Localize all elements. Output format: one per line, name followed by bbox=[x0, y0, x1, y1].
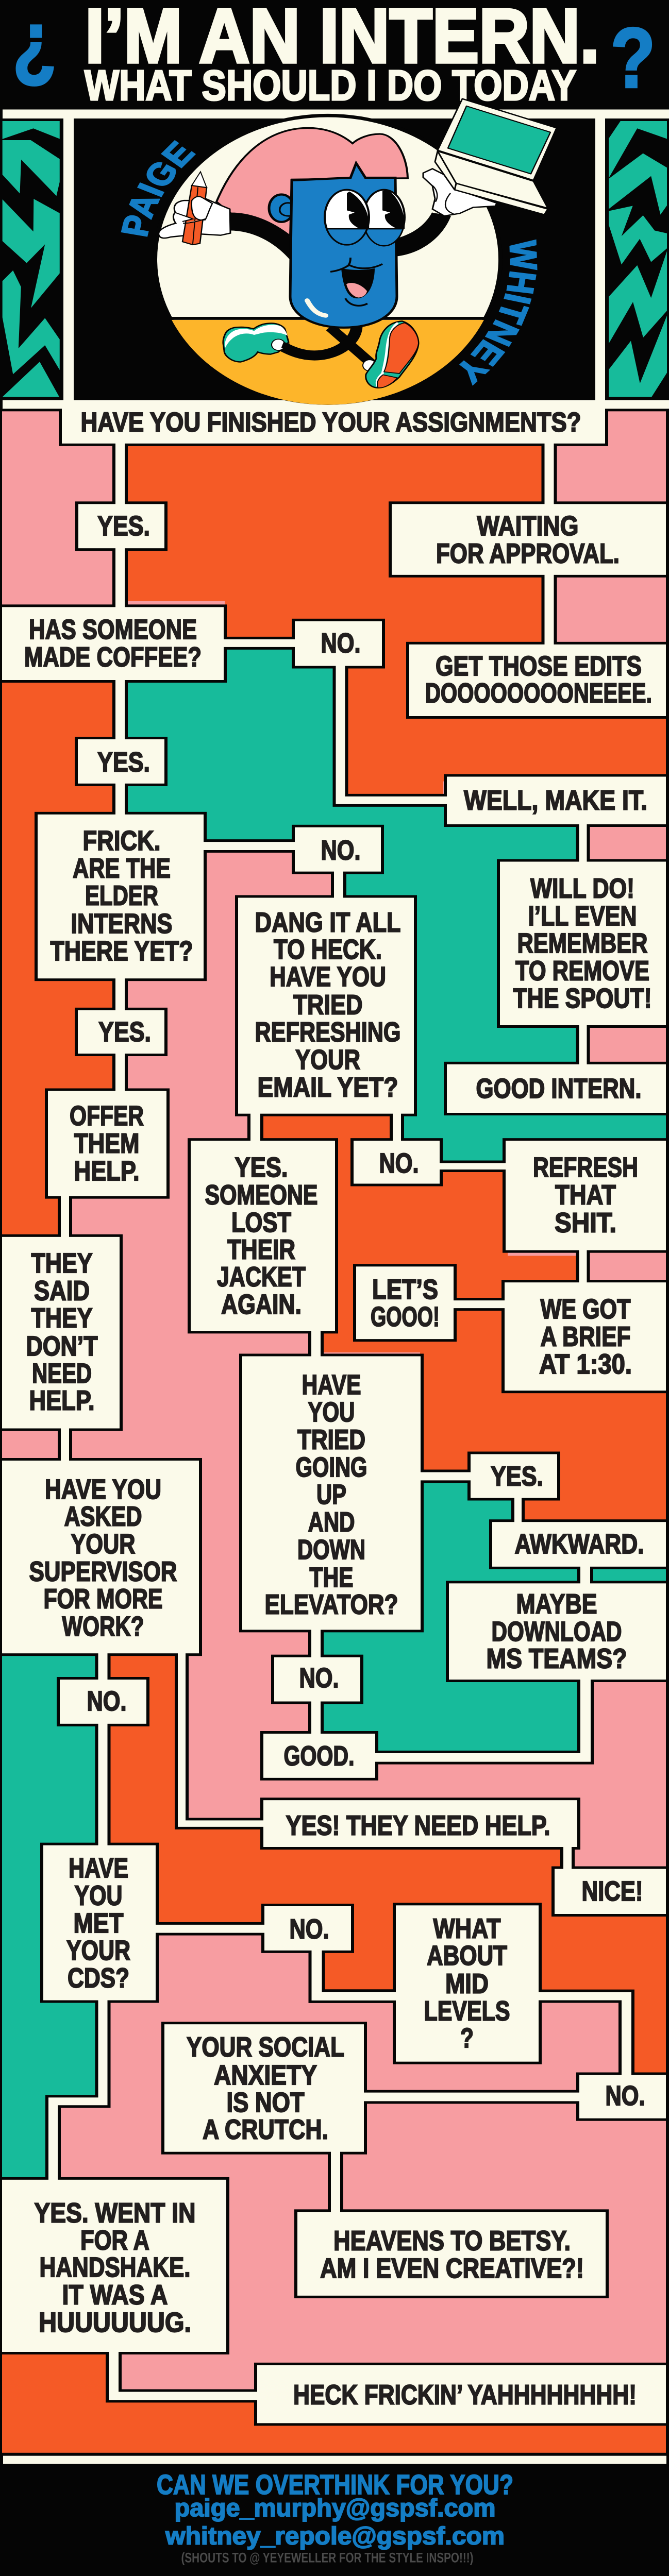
box: no bbox=[273, 1656, 362, 1703]
box: yes: YES. bbox=[491, 1460, 543, 1492]
box: no: NO. bbox=[290, 1913, 329, 1944]
ear bbox=[269, 195, 294, 222]
box: have you met your cds: YOU bbox=[75, 1880, 123, 1911]
name: Paige: PAIGE bbox=[121, 140, 196, 237]
box: yes went in for a handshake: IT WAS A bbox=[62, 2279, 168, 2310]
box: yes went in for a handshake: HUUUUUUG. bbox=[39, 2307, 191, 2338]
box: have you tried going up and down the elevator: ELEVATOR? bbox=[265, 1589, 398, 1620]
circle badge bbox=[155, 115, 500, 405]
box: have you met your cds: CDS? bbox=[68, 1962, 129, 1993]
box: they said they don't need help: HELP. bbox=[29, 1385, 95, 1416]
box: they said they don't need help: THEY bbox=[31, 1302, 93, 1333]
box: refresh that shit: THAT bbox=[555, 1179, 616, 1210]
box: we got a brief: AT 1:30. bbox=[539, 1348, 632, 1380]
box: yes someone lost their jacket again bbox=[189, 1140, 337, 1332]
connector outlines bbox=[53, 442, 627, 2396]
legs bbox=[281, 326, 372, 364]
box: your social anxiety is not a crutch: IS NOT bbox=[227, 2087, 305, 2118]
box: refresh that shit: SHIT. bbox=[555, 1207, 616, 1238]
box: have you asked your supervisor for more work: WORK? bbox=[62, 1611, 144, 1642]
footer email: Paige: paige_murphy@gspsf.com bbox=[175, 2495, 496, 2522]
box: dang it all to heck: TRIED bbox=[293, 989, 362, 1020]
box: no: NO. bbox=[321, 834, 360, 866]
box: frick, are the elder interns there yet bbox=[36, 813, 205, 980]
box: no bbox=[293, 826, 382, 873]
box: good: GOOD. bbox=[283, 1740, 355, 1771]
box: have you tried going up and down the elevator: TRIED bbox=[297, 1424, 365, 1455]
box: nice bbox=[553, 1868, 668, 1916]
box: heck frickin yah bbox=[256, 2364, 668, 2425]
box: dang it all to heck: DANG IT ALL bbox=[255, 906, 401, 938]
box: heavens to betsy bbox=[296, 2211, 607, 2297]
footer heading: CAN WE OVERTHINK FOR YOU? bbox=[157, 2470, 513, 2500]
box: have you tried going up and down the elevator: UP bbox=[316, 1479, 346, 1510]
box: your social anxiety is not a crutch bbox=[163, 2023, 365, 2153]
box: have you tried going up and down the elevator bbox=[241, 1355, 422, 1631]
laptop bbox=[435, 99, 557, 215]
box: yes someone lost their jacket again: AGAIN. bbox=[221, 1289, 302, 1320]
box: what about mid levels: MID bbox=[445, 1968, 489, 1999]
box: they said they don't need help: DON’T bbox=[26, 1330, 98, 1362]
box: frick, are the elder interns there yet: INTERNS bbox=[71, 908, 173, 939]
box: waiting for approval: WAITING bbox=[477, 510, 579, 541]
box: have you met your cds: HAVE bbox=[69, 1852, 128, 1884]
box: what about mid levels: WHAT bbox=[433, 1913, 501, 1944]
box: good intern bbox=[445, 1063, 668, 1114]
box: maybe download ms teams bbox=[447, 1582, 668, 1681]
box: yes went in for a handshake: YES. WENT IN bbox=[35, 2197, 196, 2228]
footer email: Whitney: whitney_repole@gspsf.com bbox=[165, 2522, 505, 2550]
box: yes: YES. bbox=[98, 1016, 151, 1047]
box: no bbox=[578, 2074, 668, 2120]
box: frick, are the elder interns there yet: ELDER bbox=[85, 880, 158, 911]
box: they said they don't need help: NEED bbox=[32, 1358, 92, 1389]
box: let's gooo bbox=[355, 1265, 455, 1341]
box: no bbox=[263, 1905, 353, 1952]
box: have you asked your supervisor for more work: FOR MORE bbox=[43, 1583, 163, 1614]
box: dang it all to heck: YOUR bbox=[295, 1044, 360, 1075]
box: have you tried going up and down the elevator: HAVE bbox=[302, 1369, 361, 1400]
box: dang it all to heck: HAVE YOU bbox=[270, 961, 386, 992]
box: yes bbox=[76, 738, 166, 785]
box: no bbox=[58, 1679, 148, 1725]
box: dang it all to heck: TO HECK. bbox=[274, 934, 382, 965]
box: we got a brief bbox=[503, 1281, 668, 1392]
box: well, make it bbox=[445, 775, 668, 825]
box: frick, are the elder interns there yet: ARE THE bbox=[73, 852, 171, 884]
right shoe bbox=[363, 321, 419, 388]
box: frick, are the elder interns there yet: FRICK. bbox=[82, 825, 160, 856]
box: yes someone lost their jacket again: YES. bbox=[235, 1151, 288, 1183]
box: have you asked your supervisor for more work bbox=[0, 1459, 200, 1655]
box: no: NO. bbox=[299, 1662, 339, 1693]
box: maybe download ms teams: MAYBE bbox=[516, 1588, 597, 1619]
box: have you asked your supervisor for more work: ASKED bbox=[64, 1501, 142, 1532]
connector fills bbox=[53, 442, 627, 2396]
band rule under header bbox=[2, 409, 666, 411]
page frame bbox=[0, 409, 669, 2456]
left lightning panel bbox=[3, 121, 60, 397]
box: have you tried going up and down the elevator: DOWN bbox=[297, 1534, 365, 1565]
box: yes bbox=[469, 1453, 559, 1499]
box: dang it all to heck bbox=[237, 896, 415, 1115]
box: offer them help: THEM bbox=[74, 1128, 139, 1159]
right glove bbox=[423, 169, 497, 216]
header frame bands bbox=[3, 109, 669, 409]
box: what about mid levels: LEVELS bbox=[424, 1995, 510, 2026]
box: have you asked your supervisor for more work: YOUR bbox=[71, 1528, 136, 1560]
mouth bbox=[330, 258, 382, 306]
right arm bbox=[397, 212, 451, 257]
character: blue intern bbox=[159, 99, 557, 388]
box: waiting for approval bbox=[390, 503, 668, 576]
body bbox=[290, 163, 397, 328]
box: yes they need help: YES! THEY NEED HELP. bbox=[286, 1810, 550, 1841]
box: get those edits done bbox=[408, 643, 668, 717]
box: no: NO. bbox=[321, 628, 360, 658]
box: no bbox=[352, 1140, 441, 1185]
box: yes they need help bbox=[262, 1799, 579, 1849]
box: has someone made coffee: HAS SOMEONE bbox=[29, 614, 197, 645]
hair bbox=[216, 128, 408, 236]
box: have you tried going up and down the elevator: GOING bbox=[296, 1451, 367, 1483]
box: yes went in for a handshake bbox=[0, 2178, 228, 2353]
box: have you tried going up and down the elevator: YOU bbox=[308, 1396, 355, 1428]
box: they said they don't need help bbox=[0, 1235, 121, 1430]
name: Whitney: WHITNEY bbox=[459, 239, 538, 386]
box: no bbox=[293, 620, 383, 667]
box: frick, are the elder interns there yet: THERE YET? bbox=[51, 935, 193, 967]
left shoe bbox=[223, 324, 289, 362]
left glove and pencil bbox=[159, 172, 230, 245]
box: your social anxiety is not a crutch: YOUR SOCIAL bbox=[187, 2031, 344, 2062]
box: have you met your cds bbox=[42, 1844, 157, 2002]
flowchart colour field bbox=[2, 409, 666, 2453]
box: refresh that shit bbox=[504, 1140, 668, 1251]
box: yes someone lost their jacket again: SOMEONE bbox=[205, 1179, 317, 1210]
box: have you met your cds: MET bbox=[74, 1907, 124, 1939]
box: heavens to betsy: HEAVENS TO BETSY. bbox=[333, 2225, 571, 2256]
box: yes went in for a handshake: HANDSHAKE. bbox=[40, 2251, 191, 2283]
box: have you tried going up and down the elevator: THE bbox=[309, 1562, 354, 1593]
box: yes someone lost their jacket again: THEIR bbox=[227, 1233, 295, 1265]
box: no: NO. bbox=[605, 2080, 645, 2111]
box: your social anxiety is not a crutch: ANXIETY bbox=[214, 2059, 317, 2091]
box: has someone made coffee: MADE COFFEE? bbox=[24, 641, 202, 672]
box: what about mid levels: ? bbox=[460, 2022, 474, 2054]
box: offer them help bbox=[46, 1090, 168, 1197]
box: yes bbox=[76, 1009, 166, 1055]
right lightning panel bbox=[609, 121, 667, 397]
box: yes someone lost their jacket again: LOST bbox=[231, 1207, 291, 1238]
box: dang it all to heck: REFRESHING bbox=[255, 1016, 401, 1047]
box: have you tried going up and down the elevator: AND bbox=[308, 1506, 355, 1537]
box: they said they don't need help: THEY bbox=[31, 1247, 93, 1279]
box: offer them help: OFFER bbox=[70, 1100, 144, 1131]
box: good bbox=[262, 1732, 377, 1779]
box: will do bbox=[498, 860, 668, 1026]
box: yes: YES. bbox=[97, 747, 150, 777]
box: have you met your cds: YOUR bbox=[66, 1935, 130, 1966]
right eye bbox=[363, 190, 405, 246]
box: what about mid levels bbox=[394, 1904, 540, 2063]
box: yes bbox=[77, 503, 166, 550]
box: yes: YES. bbox=[97, 510, 150, 541]
box: have you asked your supervisor for more work: SUPERVISOR bbox=[29, 1555, 177, 1587]
box: no: NO. bbox=[379, 1147, 419, 1179]
box: let's gooo: LET’S bbox=[372, 1274, 438, 1305]
box: let's gooo: GOOO! bbox=[371, 1301, 440, 1332]
box: your social anxiety is not a crutch: A CRUTCH. bbox=[203, 2114, 328, 2145]
box: have you asked your supervisor for more work: HAVE YOU bbox=[45, 1473, 161, 1505]
body highlight bbox=[307, 300, 326, 315]
box: offer them help: HELP. bbox=[74, 1155, 140, 1187]
left arm bbox=[227, 213, 292, 262]
footer credit: (SHOUTS TO @ YEYEWELLER FOR THE STYLE INSPO!!!) bbox=[181, 2550, 474, 2566]
box: dang it all to heck: EMAIL YET? bbox=[258, 1071, 398, 1103]
left eye bbox=[325, 190, 369, 245]
box: they said they don't need help: SAID bbox=[34, 1275, 90, 1306]
box: yes went in for a handshake: FOR A bbox=[80, 2225, 149, 2256]
box: have you finished your assignments bbox=[59, 403, 608, 446]
box: what about mid levels: ABOUT bbox=[427, 1940, 507, 1971]
box: no: NO. bbox=[87, 1685, 126, 1717]
box: has someone made coffee bbox=[0, 606, 225, 681]
box: awkward bbox=[491, 1521, 668, 1568]
box: yes someone lost their jacket again: JACKET bbox=[217, 1261, 306, 1292]
bottom cream band bbox=[3, 2456, 666, 2464]
